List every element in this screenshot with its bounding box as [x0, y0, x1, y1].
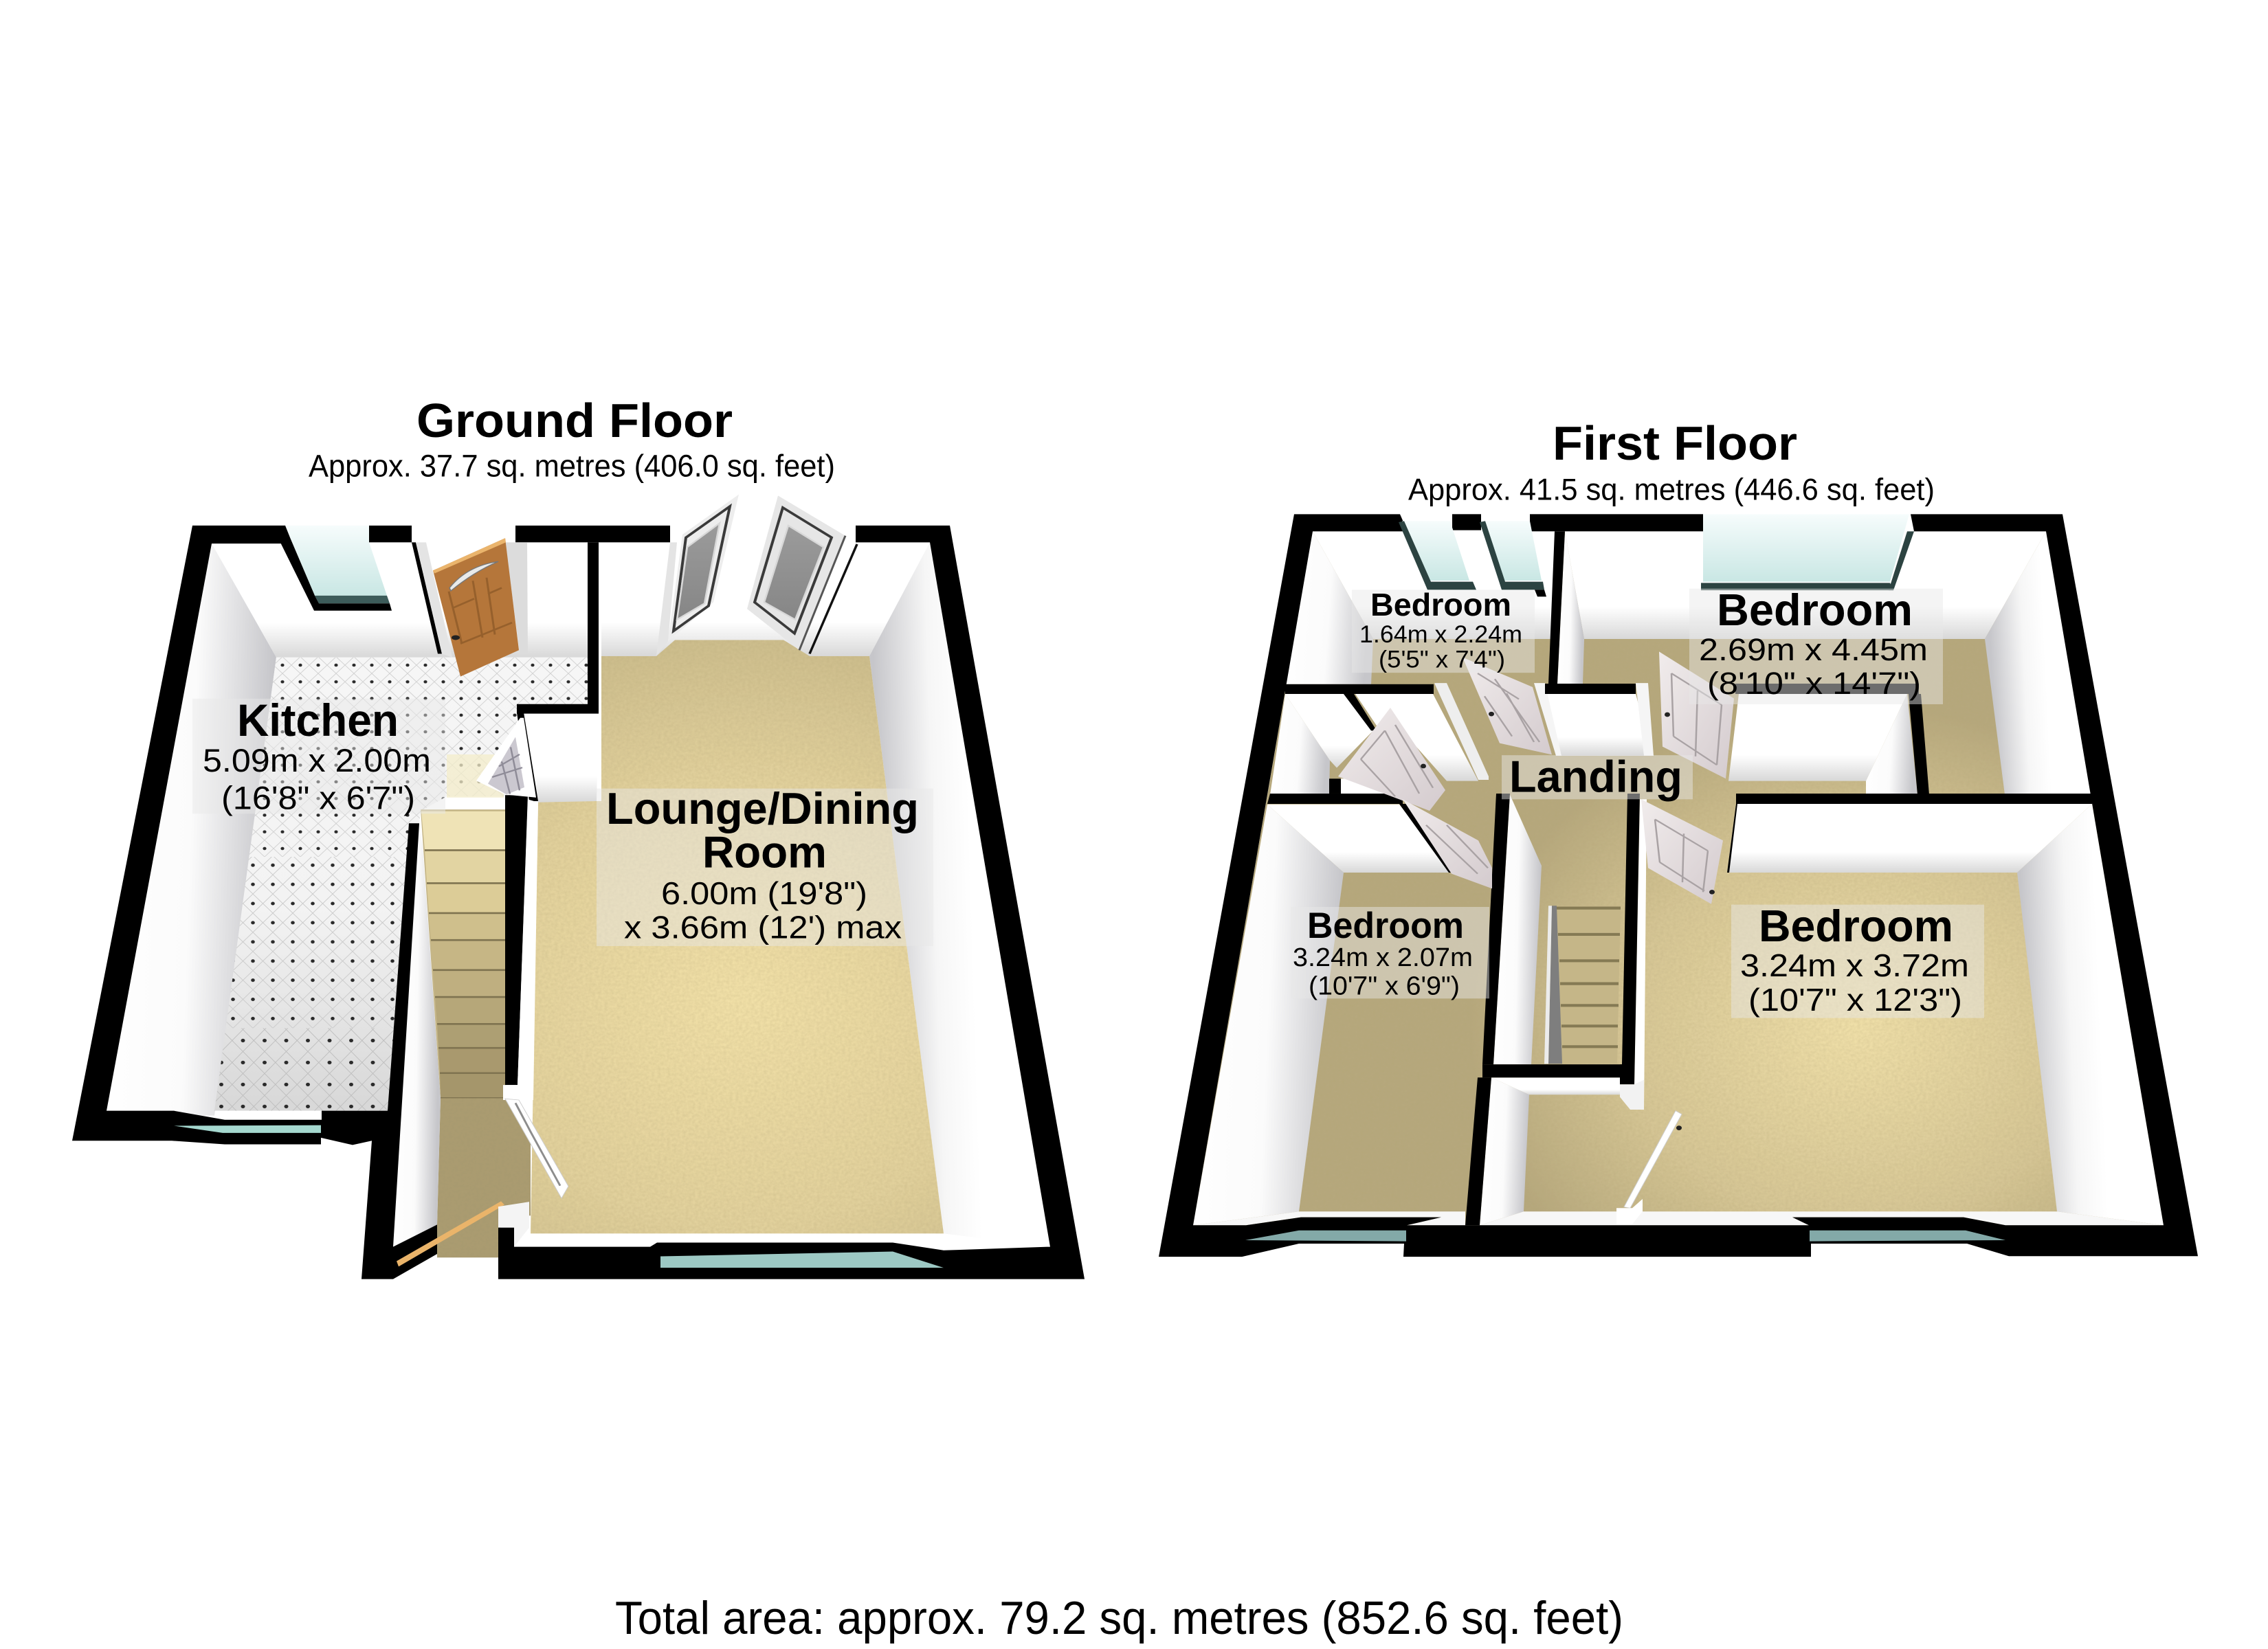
french doors: [656, 495, 857, 656]
skirting strips: [1193, 1211, 2164, 1225]
ground floor plan: [72, 394, 1085, 1279]
walls: kitchen and hall outer: [72, 526, 437, 1279]
walls: lounge outer: [498, 526, 1085, 1279]
room: left bedroom walls: [1193, 805, 1452, 1225]
label: rear bedroom: (8'10" x 14'7"): [1707, 665, 1921, 701]
hallway floor: [437, 1098, 531, 1257]
walls: interior partitions: [1267, 531, 2092, 1225]
label: lounge dining room: Lounge/Dining: [606, 784, 919, 833]
window: kitchen rear: [280, 526, 392, 611]
wardrobe in rear bedroom: [1728, 694, 1917, 795]
wall stub: landing: [1616, 1199, 1643, 1224]
title: first floor: [1408, 417, 1935, 506]
title: first floor: First Floor: [1553, 417, 1797, 471]
door: rear bedroom: [1659, 651, 1734, 778]
room: kitchen: [187, 544, 588, 1116]
title: ground floor: Ground Floor: [416, 394, 733, 447]
cupboard block: [528, 715, 599, 803]
first floor plan: [1159, 417, 2198, 1257]
white strip beside landing wall: [1634, 799, 1647, 1110]
label: left bedroom: 3.24m x 2.07m: [1293, 942, 1473, 972]
hallway wall: [393, 823, 441, 1247]
label: lounge dining room: x 3.66m (12') max: [624, 910, 902, 945]
label: rear bedroom: [1689, 585, 1943, 704]
walls: top segments and divider: [369, 526, 670, 1085]
label: small bedroom: 1.64m x 2.24m: [1359, 621, 1522, 648]
door: main bedroom: [1641, 799, 1723, 904]
door: closet: [1338, 708, 1445, 811]
window: left bedroom front: [1245, 1231, 1406, 1242]
window: small bedroom pair: [1399, 521, 1546, 596]
door: left bedroom: [1403, 799, 1492, 888]
room: main bedroom walls: [1727, 804, 2164, 1225]
label: left bedroom: (10'7" x 6'9"): [1309, 971, 1460, 1000]
stairwell wall: [1493, 795, 1542, 1064]
label: rear bedroom: Bedroom: [1717, 585, 1913, 635]
label: kitchen: [192, 695, 445, 816]
door: kitchen external: [416, 538, 528, 677]
label: main bedroom: 3.24m x 3.72m: [1740, 947, 1969, 983]
window: kitchen front: [174, 1125, 321, 1133]
subtitle: first floor area: Approx. 41.5 sq. metres (446.6 sq. feet): [1408, 473, 1935, 506]
wall pillar by entrance: [498, 1202, 529, 1247]
label: lounge dining room: Room: [702, 827, 827, 877]
stairs: [421, 809, 514, 1098]
white wall strip beside stairs: [503, 799, 538, 1100]
room: rear bedroom walls: [1557, 531, 2092, 795]
lower cupboard room walls: [1480, 1077, 1620, 1225]
room: lounge dining room: [514, 542, 1050, 1250]
label: lounge dining room: 6.00m (19'8"): [661, 875, 867, 911]
label: kitchen: 5.09m x 2.00m: [203, 742, 431, 778]
total area footer: Total area: approx. 79.2 sq. metres (852.6 sq. feet): [615, 1592, 1623, 1644]
wall pillar: landing: [1620, 1080, 1644, 1110]
room: small bedroom walls: [1285, 531, 1555, 684]
label: small bedroom: [1352, 586, 1535, 673]
label: left bedroom: Bedroom: [1307, 906, 1464, 946]
label: left bedroom: [1291, 906, 1489, 1000]
door: lounge internal: [505, 1099, 568, 1198]
label: landing: Landing: [1509, 752, 1682, 802]
subtitle: ground floor area: Approx. 37.7 sq. metres (406.0 sq. feet): [309, 449, 835, 484]
door: lower landing: [1624, 1111, 1682, 1208]
label: rear bedroom: 2.69m x 4.45m: [1699, 631, 1928, 667]
carpet base: [1193, 532, 2164, 1225]
door: internal kitchen to stairs: [476, 718, 536, 798]
handrail: wooden door edge: [397, 1201, 504, 1266]
label: small bedroom: (5'5" x 7'4"): [1379, 647, 1505, 673]
label: main bedroom: Bedroom: [1759, 901, 1953, 951]
label: main bedroom: (10'7" x 12'3"): [1748, 981, 1962, 1018]
window: rear bedroom: [1701, 514, 1914, 590]
label: small bedroom: Bedroom: [1370, 586, 1511, 622]
landing rear wall: [1534, 683, 1654, 756]
label: main bedroom: [1731, 901, 1984, 1018]
window: lounge front: [660, 1252, 944, 1268]
label: kitchen: (16'8" x 6'7"): [221, 780, 415, 816]
walls: outer shell: [1159, 514, 2198, 1257]
door: small bedroom: [1463, 658, 1552, 754]
label: kitchen: Kitchen: [237, 695, 399, 746]
closet: [1270, 683, 1489, 795]
window: main bedroom front: [1810, 1231, 2005, 1242]
label: lounge dining room: [597, 784, 933, 946]
first floor stairs: [1544, 906, 1621, 1064]
title: ground floor: [309, 394, 835, 484]
